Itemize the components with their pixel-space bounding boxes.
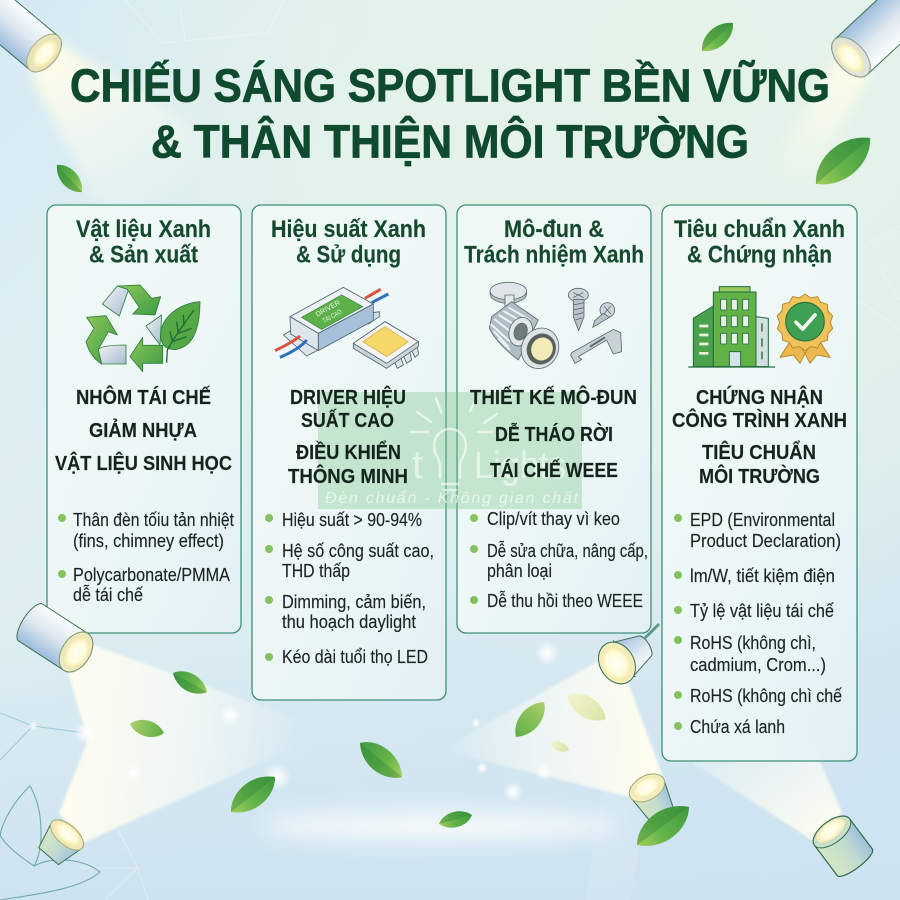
key points: TIÊU CHUẨN bbox=[702, 440, 816, 464]
key points: VẬT LIỆU SINH HỌC bbox=[55, 451, 232, 475]
bullet list bbox=[674, 509, 843, 737]
heading: & Sử dụng bbox=[296, 242, 401, 268]
heading: Vật liệu Xanh bbox=[76, 216, 211, 243]
heading bbox=[464, 216, 644, 268]
bullet list: RoHS (không chì chế bbox=[690, 685, 843, 706]
bullet list: Chứa xá lanh bbox=[690, 716, 785, 737]
key points: CÔNG TRÌNH XANH bbox=[672, 408, 847, 432]
leaf: pale bbox=[548, 739, 571, 754]
key points: TÁI CHẾ WEEE bbox=[490, 459, 618, 482]
watermark logo bbox=[318, 392, 582, 509]
key points bbox=[470, 385, 637, 482]
bullet list: dễ tái chế bbox=[73, 584, 144, 605]
bullet list: Product Declaration) bbox=[690, 530, 841, 551]
bullet list: thu hoạch daylight bbox=[282, 611, 416, 632]
panel: Vật liệu Xanh & Sản xuất bbox=[55, 216, 234, 605]
title: CHIẾU SÁNG SPOTLIGHT BỀN VỮNG bbox=[70, 60, 830, 112]
panel: Hiệu suất Xanh & Sử dụng bbox=[265, 216, 434, 667]
bullet list: THD thấp bbox=[282, 560, 350, 581]
key points: THIẾT KẾ MÔ-ĐUN bbox=[470, 385, 637, 409]
icon: modular spotlight, screws and clip bbox=[489, 282, 622, 375]
leaf bbox=[437, 808, 474, 831]
key points bbox=[672, 385, 847, 488]
key points: SUẤT CAO bbox=[301, 409, 394, 432]
icon: recycle symbol and leaf bbox=[86, 285, 200, 372]
heading: & Chứng nhận bbox=[687, 242, 832, 268]
bullet list: Polycarbonate/PMMA bbox=[73, 564, 231, 585]
leaf: pale bbox=[562, 686, 611, 728]
key points: GIẢM NHỰA bbox=[89, 419, 197, 442]
leaf bbox=[508, 696, 552, 743]
key points: THÔNG MINH bbox=[288, 464, 408, 488]
heading bbox=[76, 216, 211, 268]
leaf bbox=[352, 734, 410, 786]
bullet list: Dimming, cảm biến, bbox=[282, 591, 426, 612]
spotlight: middle left bbox=[12, 600, 100, 678]
key points bbox=[288, 385, 408, 488]
bullet list: (fins, chimney effect) bbox=[73, 530, 224, 551]
heading: Mô-đun & bbox=[504, 216, 604, 243]
bullet list: RoHS (không chì, bbox=[690, 632, 816, 653]
bullet list: Dễ thu hồi theo WEEE bbox=[487, 590, 643, 611]
watermark logo: t bbox=[412, 443, 423, 487]
heading: Tiêu chuẩn Xanh bbox=[674, 216, 845, 243]
bullet list: Kéo dài tuổi thọ LED bbox=[282, 646, 428, 667]
panel: Tiêu chuẩn Xanh & Chứng nhận bbox=[672, 216, 847, 737]
bullet list: phân loại bbox=[487, 560, 552, 581]
bullet list: Hệ số công suất cao, bbox=[282, 540, 434, 561]
leaf bbox=[51, 159, 88, 198]
bullet list: Hiệu suất > 90-94% bbox=[282, 509, 422, 530]
icon: green building and certification badge bbox=[688, 287, 833, 367]
leaf: over bottom spotlight bbox=[628, 795, 698, 857]
title bbox=[70, 60, 830, 168]
leaf bbox=[806, 126, 880, 196]
heading: Hiệu suất Xanh bbox=[271, 216, 426, 243]
key points: DRIVER HIỆU bbox=[290, 385, 406, 409]
bullet list: Dễ sửa chữa, nâng cấp, bbox=[487, 540, 648, 561]
heading bbox=[674, 216, 845, 268]
spotlight: bottom left bbox=[34, 814, 89, 869]
watermark logo: Lights bbox=[474, 445, 566, 487]
key points: MÔI TRƯỜNG bbox=[699, 464, 820, 488]
heading bbox=[271, 216, 426, 268]
bullet list: Clip/vít thay vì keo bbox=[487, 508, 620, 529]
panel: Mô-đun & Trách nhiệm Xanh bbox=[464, 216, 648, 611]
leaf bbox=[223, 767, 283, 822]
bullet list bbox=[265, 509, 434, 667]
leaf bbox=[128, 716, 166, 741]
icon: LED driver and chip bbox=[275, 287, 419, 368]
spotlight: top right bbox=[824, 0, 900, 84]
bullet list: EPD (Environmental bbox=[690, 509, 835, 530]
leaf bbox=[169, 665, 211, 700]
bullet list: Thân đèn tốiu tản nhiệt bbox=[73, 509, 234, 530]
bullet list: lm/W, tiết kiệm điện bbox=[690, 565, 835, 586]
bullet list: cadmium, Crom...) bbox=[690, 654, 826, 675]
heading: Trách nhiệm Xanh bbox=[464, 242, 644, 268]
key points: NHÔM TÁI CHẾ bbox=[76, 385, 211, 409]
key points: CHỨNG NHẬN bbox=[696, 385, 823, 409]
spotlight: centre right with cord bbox=[591, 624, 660, 691]
key points: ĐIỀU KHIỂN bbox=[296, 441, 401, 464]
panel backgrounds bbox=[47, 205, 857, 761]
key points: DỄ THÁO RỜI bbox=[495, 422, 613, 446]
spotlight: bottom centre bbox=[625, 768, 679, 825]
spotlight: top left bbox=[0, 0, 68, 78]
bullet list: Tỷ lệ vật liệu tái chế bbox=[690, 600, 835, 621]
leaf bbox=[696, 16, 739, 58]
watermark logo: Đèn chuẩn - Không gian chất bbox=[325, 489, 579, 507]
icon: LED driver and chip: DRIVER bbox=[315, 300, 342, 319]
icon: LED driver and chip: TÁI CAO bbox=[321, 307, 344, 325]
sparkles bbox=[28, 641, 559, 802]
title: & THÂN THIỆN MÔI TRƯỜNG bbox=[151, 116, 749, 168]
spotlight: bottom right bbox=[808, 810, 876, 880]
bullet list bbox=[470, 508, 648, 611]
heading: & Sản xuất bbox=[89, 242, 198, 268]
key points bbox=[55, 385, 232, 475]
bullet list bbox=[58, 509, 234, 605]
